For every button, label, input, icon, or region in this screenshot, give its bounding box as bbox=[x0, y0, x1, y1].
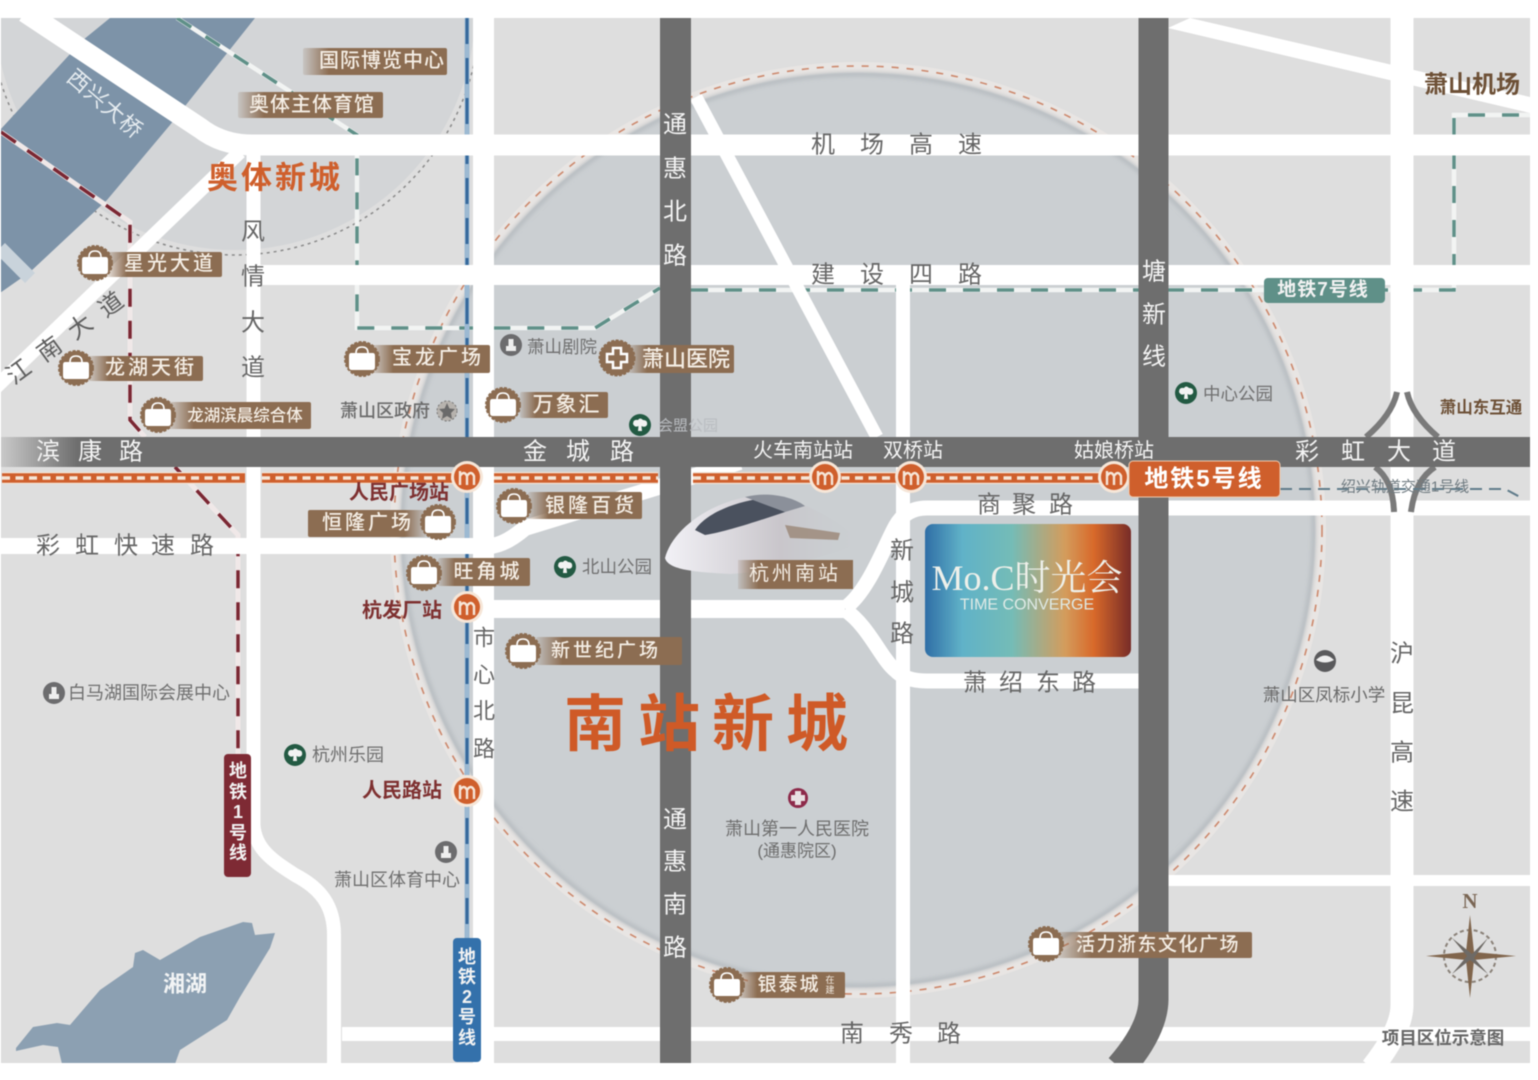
shop: 活力浙东文化广场: 活力浙东文化广场 bbox=[1076, 934, 1240, 956]
label: 西兴大桥: 西兴大桥 bbox=[62, 64, 148, 144]
label: 地铁7号线 bbox=[1264, 278, 1385, 303]
label: 萧山东互通: 萧山东互通 bbox=[1440, 397, 1523, 417]
label: 绍兴轨道交通1号线: 绍兴轨道交通1号线 bbox=[1341, 478, 1469, 496]
poi: 萧山第一人民医院: 萧山第一人民医院 bbox=[725, 819, 869, 839]
label: 杭州南站 bbox=[738, 560, 853, 589]
shop: 龙湖滨晨综合体: 龙湖滨晨综合体 bbox=[187, 406, 303, 425]
label: 沪昆高速: 沪昆高速 bbox=[1390, 640, 1414, 816]
poi: 萧山区体育中心 bbox=[334, 841, 460, 890]
metro station: 人民路站: 人民路站 bbox=[362, 779, 442, 802]
label: 萧绍东路: 萧绍东路 bbox=[963, 670, 1096, 696]
area: 奥体新城 circle bbox=[0, 0, 480, 255]
metro line 7 bbox=[177, 18, 1530, 328]
compass bbox=[1426, 889, 1516, 998]
shop: 旺角城 bbox=[407, 556, 530, 590]
label: 湘湖: 湘湖 bbox=[163, 972, 207, 996]
label: 风情大道: 风情大道 bbox=[241, 218, 265, 382]
label: 通惠北路: 通惠北路 bbox=[663, 112, 687, 270]
poi: 会盟公园 bbox=[629, 414, 718, 436]
metro station: 人民广场站: 人民广场站 bbox=[349, 481, 449, 504]
project card: Mo.C时光会: TIME CONVERGE bbox=[960, 596, 1094, 614]
metro station: 人民路站 bbox=[362, 775, 483, 807]
shop: 星光大道: 星光大道 bbox=[124, 252, 216, 275]
label: 彩虹大道: 彩虹大道 bbox=[1295, 438, 1456, 466]
poi: 萧山区凤标小学 bbox=[1263, 650, 1385, 705]
metro station: 姑娘桥站: 姑娘桥站 bbox=[1074, 439, 1154, 462]
heading: 奥体新城: 奥体新城 bbox=[207, 160, 343, 196]
label: 杭州南站: 杭州南站 bbox=[749, 562, 841, 585]
metro station: 姑娘桥站 bbox=[1074, 439, 1154, 493]
shop: 新世纪广场 bbox=[506, 634, 682, 668]
shaoxing rail line dashed bbox=[1280, 489, 1520, 497]
label: 机场高速: 机场高速 bbox=[811, 132, 982, 158]
poi: 萧山第一人民医院: (通惠院区) bbox=[757, 842, 837, 860]
label: 地铁5号线: 地铁5号线 bbox=[1144, 466, 1264, 492]
shop: 银隆百货: 银隆百货 bbox=[545, 494, 637, 517]
heading: 南站新城: 南站新城 bbox=[564, 690, 860, 760]
label: 商聚路: 商聚路 bbox=[977, 492, 1073, 518]
label: 地铁2号线: 地铁2号线 bbox=[458, 947, 476, 1048]
poi: 北山公园: 北山公园 bbox=[582, 557, 652, 577]
train: 杭州南站 bbox=[665, 495, 856, 589]
label: 地铁1号线: 地铁1号线 bbox=[229, 761, 247, 863]
shop: 恒隆广场: 恒隆广场 bbox=[322, 511, 414, 534]
metro line 5 bbox=[2, 472, 1130, 484]
interchange arcs bbox=[1366, 392, 1438, 512]
metro line 1 bbox=[1, 132, 238, 755]
shop: 万象汇 bbox=[486, 388, 608, 422]
poi: 中心公园: 中心公园 bbox=[1203, 384, 1273, 404]
shop: 龙湖滨晨综合体 bbox=[141, 398, 311, 432]
shop: 宝龙广场: 宝龙广场 bbox=[392, 346, 484, 369]
label: 南秀路: 南秀路 bbox=[840, 1020, 961, 1048]
poi: 萧山剧院: 萧山剧院 bbox=[527, 337, 597, 357]
label: 滨康路: 滨康路 bbox=[36, 438, 143, 466]
label: 地铁2号线 bbox=[453, 938, 481, 1062]
shop: 恒隆广场 bbox=[308, 505, 455, 539]
label: 新城路: 新城路 bbox=[890, 538, 914, 648]
label: 地铁5号线 bbox=[1129, 461, 1280, 497]
poi: 杭州乐园 bbox=[284, 744, 384, 766]
shop: 奥体主体育馆: 奥体主体育馆 bbox=[249, 93, 375, 116]
metro station: 杭发厂站: 杭发厂站 bbox=[362, 598, 442, 622]
shop: 银泰城: 在建 bbox=[825, 974, 835, 995]
label: 萧山机场: 萧山机场 bbox=[1424, 72, 1520, 98]
label: 塘新线: 塘新线 bbox=[1142, 258, 1166, 370]
shop: 银隆百货 bbox=[497, 489, 642, 523]
label: 彩虹快速路: 彩虹快速路 bbox=[36, 532, 214, 560]
shop: 旺角城: 旺角城 bbox=[454, 560, 522, 583]
hospital: 萧山医院: 萧山医院 bbox=[642, 346, 730, 372]
shop: 活力浙东文化广场 bbox=[1029, 927, 1252, 961]
poi: 会盟公园: 会盟公园 bbox=[658, 418, 718, 434]
shop: 龙湖天街 bbox=[59, 351, 203, 385]
shop: 银泰城: 银泰城 bbox=[757, 974, 821, 996]
hospital: 萧山医院 bbox=[600, 340, 734, 376]
area: 南站新城 circle bbox=[394, 66, 1322, 994]
shop: 星光大道 bbox=[78, 246, 222, 280]
poi: 萧山区凤标小学: 萧山区凤标小学 bbox=[1263, 685, 1385, 705]
label: 地铁7号线: 地铁7号线 bbox=[1277, 278, 1369, 300]
lake: 湘湖 bbox=[16, 922, 275, 1064]
shop: 万象汇: 万象汇 bbox=[532, 394, 602, 416]
metro station: 杭发厂站 bbox=[362, 591, 483, 623]
poi: 中心公园 bbox=[1175, 382, 1273, 404]
project card: Mo.C时光会: Mo.C时光会 bbox=[931, 558, 1123, 598]
metro station: 火车南站站: 火车南站站 bbox=[753, 439, 853, 462]
shop: 宝龙广场 bbox=[345, 342, 490, 376]
label: 江南大道: 江南大道 bbox=[1, 287, 129, 390]
label: 地铁1号线 bbox=[224, 754, 251, 877]
shop: 银泰城 bbox=[710, 968, 845, 1002]
poi: 萧山第一人民医院 bbox=[725, 788, 869, 860]
metro line 2 bbox=[464, 18, 470, 940]
metro station: 双桥站 bbox=[883, 439, 943, 493]
shop: 新世纪广场: 新世纪广场 bbox=[551, 640, 661, 662]
shop: 龙湖天街: 龙湖天街 bbox=[105, 356, 197, 379]
poi: 萧山区政府: 萧山区政府 bbox=[340, 400, 430, 421]
label: 通惠南路: 通惠南路 bbox=[663, 806, 687, 962]
label: 建设四路: 建设四路 bbox=[811, 262, 982, 288]
project card: Mo.C时光会 bbox=[925, 524, 1131, 657]
poi: 杭州乐园: 杭州乐园 bbox=[312, 745, 384, 765]
label: 市心北路: 市心北路 bbox=[473, 626, 495, 762]
river: 钱塘江 bbox=[0, 18, 255, 293]
metro station: 火车南站站 bbox=[753, 439, 853, 493]
poi: 萧山剧院 bbox=[500, 334, 597, 357]
poi: 萧山区体育中心: 萧山区体育中心 bbox=[334, 870, 460, 890]
poi: 白马湖国际会展中心: 白马湖国际会展中心 bbox=[68, 683, 230, 703]
metro station: 人民广场站 bbox=[349, 461, 483, 504]
shop: 国际博览中心: 国际博览中心 bbox=[319, 49, 445, 72]
compass: N bbox=[1462, 889, 1478, 913]
metro station: 双桥站: 双桥站 bbox=[883, 439, 943, 462]
label: 金城路: 金城路 bbox=[523, 438, 634, 466]
poi: 北山公园 bbox=[554, 556, 652, 578]
caption: 项目区位示意图: 项目区位示意图 bbox=[1382, 1028, 1504, 1048]
